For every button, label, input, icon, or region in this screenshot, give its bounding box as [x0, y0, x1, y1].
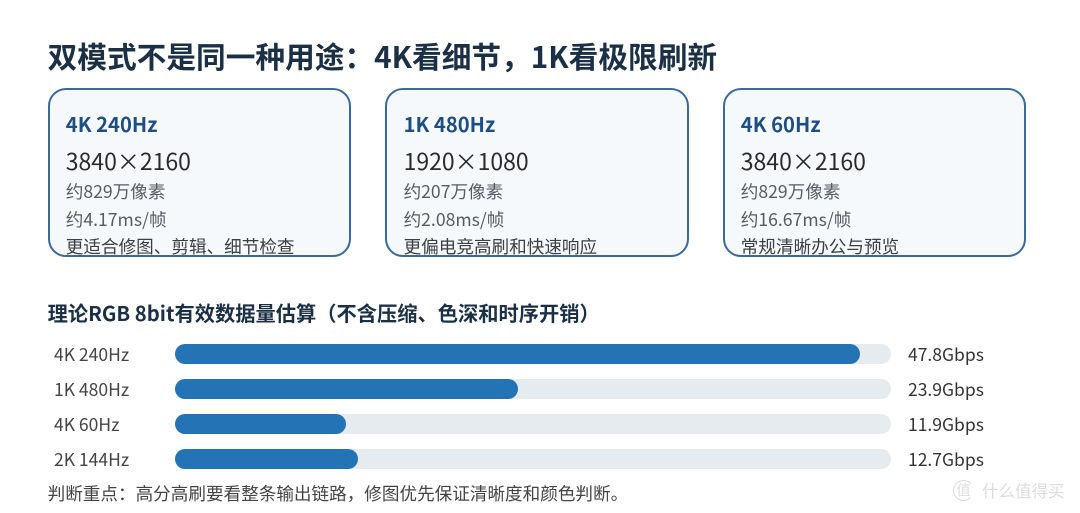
panel: 4K 240Hz: [48, 88, 351, 257]
resolution: 3840×2160: [66, 143, 191, 177]
panel: 4K 60Hz: [723, 88, 1026, 257]
card heading: 1K 480Hz: [404, 109, 495, 138]
row: 2K 144Hz: 12.7Gbps: [908, 446, 984, 472]
watermark text: 什么值得买: [982, 478, 1064, 502]
frame time: 约2.08ms/帧: [404, 207, 504, 232]
frame time: 约16.67ms/帧: [741, 207, 851, 232]
row: 2K 144Hz: [54, 446, 984, 472]
pixel count: 约829万像素: [741, 179, 840, 204]
resolution: 3840×2160: [741, 143, 866, 177]
watermark: [953, 478, 1064, 502]
pixel count: 约207万像素: [404, 179, 503, 204]
row: 4K 60Hz: 4K 60Hz: [54, 412, 119, 436]
panel: 1K 480Hz: [385, 88, 689, 257]
row: 4K 60Hz: 11.9Gbps: [908, 412, 984, 436]
row: 2K 144Hz: 2K 144Hz: [54, 446, 129, 472]
chart heading: 理论RGB 8bit有效数据量估算（不含压缩、色深和时序开销）: [48, 298, 600, 327]
bar chart: [54, 342, 984, 472]
footnote: 判断重点：高分高刷要看整条输出链路，修图优先保证清晰度和颜色判断。: [48, 481, 628, 506]
row: 1K 480Hz: [54, 376, 984, 402]
title: 双模式不是同一种用途：4K看细节，1K看极限刷新: [48, 34, 717, 77]
card heading: 4K 60Hz: [741, 109, 821, 138]
row: 4K 240Hz: 4K 240Hz: [54, 342, 129, 366]
row: 4K 240Hz: [54, 342, 984, 366]
pixel count: 约829万像素: [66, 179, 165, 204]
row: 4K 240Hz: 47.8Gbps: [908, 342, 984, 366]
frame time: 约4.17ms/帧: [66, 207, 167, 232]
icon: watermark badge: [953, 480, 974, 501]
icon: watermark badge: 值: [956, 480, 970, 500]
resolution: 1920×1080: [404, 143, 529, 177]
card heading: 4K 240Hz: [66, 109, 157, 138]
row: 1K 480Hz: 1K 480Hz: [54, 376, 129, 402]
row: 1K 480Hz: 23.9Gbps: [908, 376, 984, 402]
row: 4K 60Hz: [54, 412, 984, 436]
